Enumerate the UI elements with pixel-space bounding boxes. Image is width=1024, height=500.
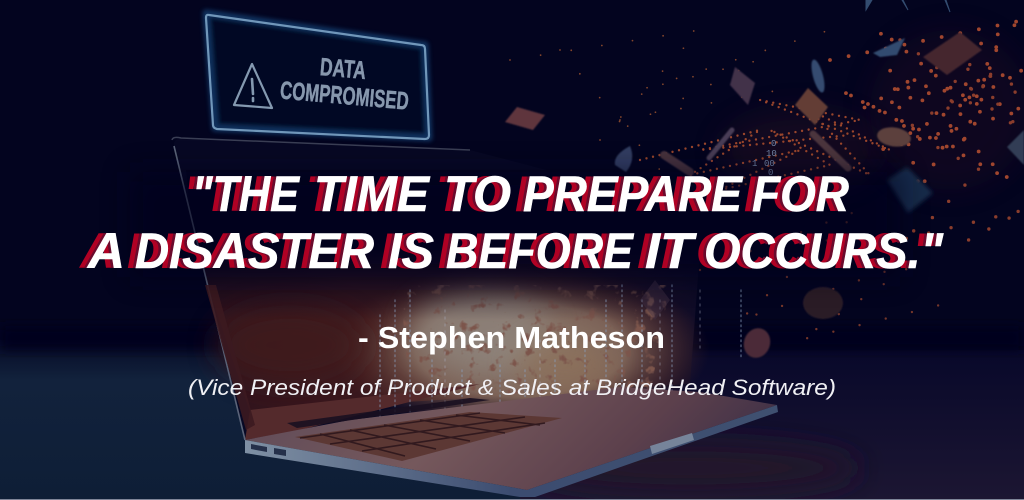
particle haze	[720, 30, 1024, 190]
quote line one: PREPARE	[520, 166, 741, 222]
quote line two: BEFORE	[443, 223, 631, 279]
binary digits: 0	[768, 168, 773, 178]
quote line one: TIME	[306, 166, 423, 222]
quote line one: "THE	[192, 166, 300, 222]
floating app icons and fragments	[505, 0, 1024, 362]
quote line two: IT	[637, 223, 690, 279]
quote line one: "THE	[189, 166, 297, 222]
laptop screen	[172, 137, 710, 440]
sign text: data compromised	[279, 53, 410, 116]
quote line one: TO	[441, 166, 508, 222]
binary digits: 1	[752, 159, 757, 169]
quote line two: BEFORE	[446, 223, 634, 279]
quote line two: IS	[380, 223, 426, 279]
quote line two: IS	[388, 223, 434, 279]
laptop front edge	[245, 405, 778, 497]
attribution name: - Stephen Matheson	[358, 320, 665, 355]
laptop	[172, 137, 778, 497]
quote line two: BEFORE	[438, 223, 626, 279]
quote line two: OCCURS."	[704, 223, 944, 279]
quote line one: PREPARE	[523, 166, 744, 222]
quote line two: OCCURS."	[696, 223, 936, 279]
attribution role: (Vice President of Product & Sales at BridgeHead Software)	[188, 375, 836, 400]
quote line two: A	[86, 223, 125, 279]
bottom edge line	[0, 499, 1024, 500]
quote line two: DISASTER	[132, 223, 371, 279]
quote line one: FOR	[749, 166, 846, 222]
quote line two: A	[78, 223, 117, 279]
quote line one: PREPARE	[515, 166, 736, 222]
quote line two: OCCURS."	[701, 223, 941, 279]
binary digits: 0	[771, 139, 776, 149]
quote line two: DISASTER	[135, 223, 374, 279]
neon warning sign	[206, 13, 429, 139]
quote line one: "THE	[184, 166, 292, 222]
quote line two: A	[83, 223, 122, 279]
quote line one: TO	[436, 166, 503, 222]
table surface	[0, 326, 1024, 500]
quote line two: IT	[642, 223, 695, 279]
icon: warning triangle	[234, 64, 272, 108]
quote line one	[184, 166, 849, 222]
sign text: data compromised: COMPROMISED	[279, 76, 410, 116]
quote line one: TIME	[311, 166, 428, 222]
quote line one: FOR	[744, 166, 841, 222]
quote line one: TIME	[314, 166, 431, 222]
dark halo behind quote	[130, 172, 900, 277]
quote line two	[78, 223, 944, 279]
quote line one: FOR	[752, 166, 849, 222]
quote heading	[78, 166, 944, 279]
quote line two: IS	[385, 223, 431, 279]
binary digits	[752, 139, 777, 178]
quote line two: DISASTER	[127, 223, 366, 279]
keyboard	[295, 412, 562, 461]
binary rain	[380, 285, 741, 430]
exploding data particles	[510, 20, 1024, 340]
binary digits: 00	[764, 159, 775, 169]
quote line one: TO	[444, 166, 511, 222]
binary digits: 10	[766, 149, 777, 159]
quote line two: IT	[645, 223, 698, 279]
laptop base	[245, 387, 778, 497]
sign text: data compromised: DATA	[319, 53, 367, 85]
